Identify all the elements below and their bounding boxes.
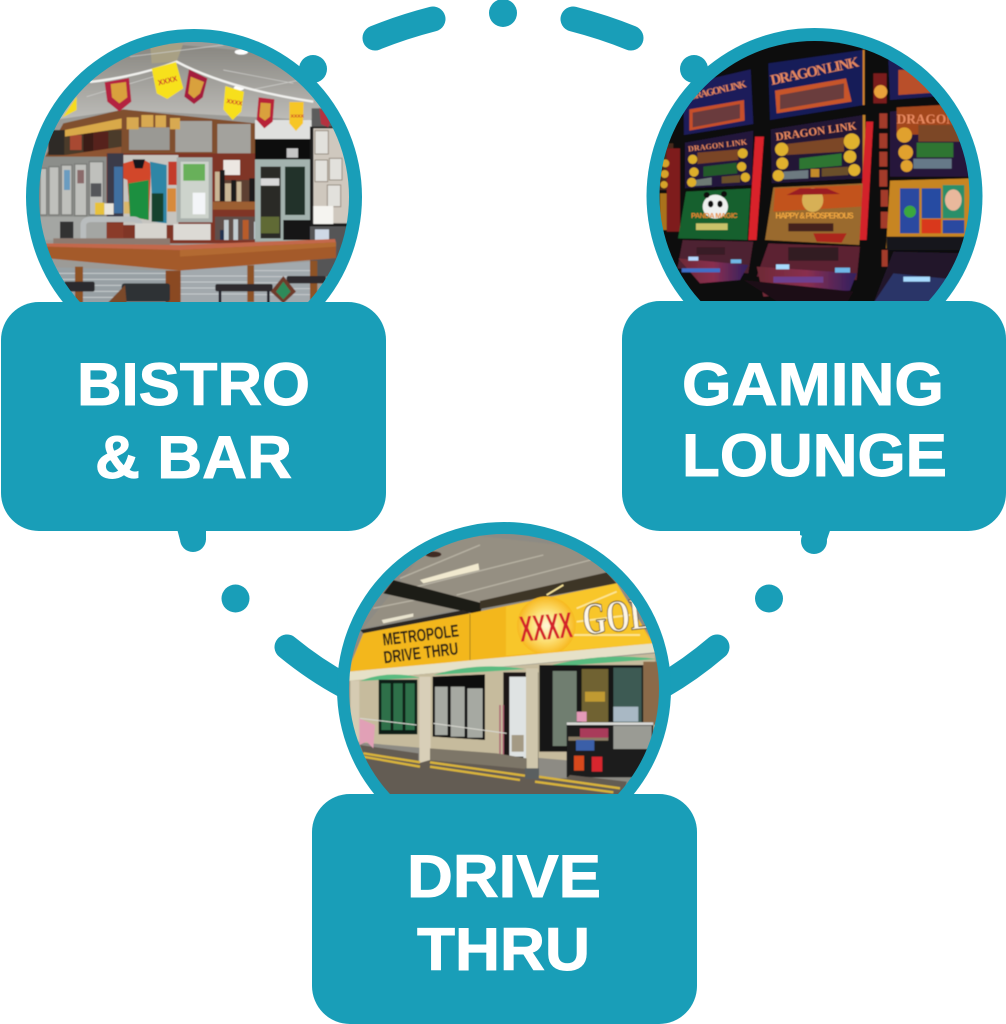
coasters (127, 115, 180, 129)
pillars (419, 677, 431, 763)
box with tail dot (622, 301, 1006, 554)
photo: gaming machines: PANDA MAGIC (691, 211, 738, 220)
panel: bistro and bar (1, 20, 386, 552)
bar counter (45, 239, 336, 251)
heading: drive thru: DRIVE (407, 843, 601, 910)
heading: gaming lounge: GAMING (682, 351, 944, 418)
photo: drive thru shopfront: GOLD (580, 586, 675, 645)
dot: left lower (222, 584, 250, 612)
circle frame: bistro (26, 29, 362, 365)
red wall (107, 153, 255, 243)
heading: bistro and bar: BISTRO (77, 351, 310, 418)
photo: gaming machines: DRAGON LINK (687, 137, 748, 154)
dot: right lower (755, 584, 783, 612)
circle frame: gaming (646, 28, 982, 364)
right upper wall (255, 120, 312, 143)
rack (567, 722, 653, 777)
box with tail dot (1, 302, 386, 552)
corrugated panels (55, 267, 167, 303)
machine 2 top (768, 50, 864, 120)
left fridges (39, 156, 107, 216)
xxxx labels: XXXX (157, 74, 178, 87)
heading: bistro and bar: & BAR (95, 424, 292, 491)
notice (223, 160, 240, 175)
stools (64, 282, 95, 292)
centre vertical sign (873, 73, 887, 103)
ground (360, 745, 627, 798)
heading: gaming lounge: LOUNGE (682, 422, 947, 489)
label box: bistro and bar (1, 302, 386, 552)
machine 1 mid (685, 131, 753, 188)
machine 1 console (677, 240, 753, 273)
photo: gaming machines (660, 41, 970, 301)
photo: gaming machines: DRAGON LINK (688, 79, 748, 103)
box (312, 794, 697, 1024)
notice board (310, 127, 350, 227)
label box: drive thru (312, 794, 697, 1024)
bunting (90, 62, 313, 102)
pink trolley (359, 718, 375, 748)
cabinet (177, 157, 212, 222)
panel: drive thru (312, 515, 697, 1024)
right fridge (255, 159, 310, 241)
tap (83, 219, 141, 240)
dash: lower left (287, 647, 345, 686)
photo: bar interior (39, 42, 349, 302)
wood frame (43, 109, 255, 160)
machine 1 screen (678, 188, 751, 240)
dash: top left (375, 19, 433, 38)
photo: gaming machines: HAPPY & PROSPEROUS (775, 211, 854, 220)
bottles left (48, 130, 122, 155)
beams (383, 580, 483, 615)
yellow sign (350, 583, 653, 672)
machine 2 console (757, 243, 860, 280)
far left machine sliver (658, 143, 673, 190)
photo: drive thru shopfront: DRIVE THRU (382, 638, 459, 667)
photo: bar interior: XXXX (291, 113, 305, 119)
green arches (360, 675, 420, 681)
awning beam (349, 643, 655, 681)
machine 1 top (683, 69, 753, 135)
photo: drive thru shopfront: XXXX (518, 604, 574, 650)
photo: gaming machines: DRAGON (897, 111, 956, 126)
dash: top right (573, 19, 631, 38)
shop window right (539, 665, 643, 752)
machine 2 mid (771, 115, 863, 183)
panel: gaming lounge (622, 20, 1006, 554)
photo: drive thru shopfront: METROPOLE (381, 620, 460, 650)
dot: top centre (489, 0, 517, 27)
wall (350, 653, 660, 768)
photo: gaming machines: DRAGON LINK (775, 120, 857, 144)
photo: drive thru shopfront (349, 534, 659, 794)
dash: lower right (662, 647, 717, 686)
heading: drive thru: THRU (417, 916, 590, 983)
mid window (433, 674, 485, 740)
red side glow (748, 137, 764, 240)
machine 2 screen (765, 183, 863, 245)
photo: bar interior: XXXX (226, 99, 243, 108)
machine 3 (888, 60, 934, 101)
shirts (123, 160, 152, 220)
circle frame: drive thru (337, 522, 671, 856)
connecting arc: dashes and dots between the circles (222, 0, 783, 686)
liquor shelf (219, 180, 250, 202)
photo: gaming machines: DRAGON LINK (769, 54, 861, 89)
label box: gaming lounge (622, 301, 1006, 554)
doorway dark (503, 672, 538, 769)
left fridges (379, 680, 417, 734)
merchandise (107, 153, 123, 217)
